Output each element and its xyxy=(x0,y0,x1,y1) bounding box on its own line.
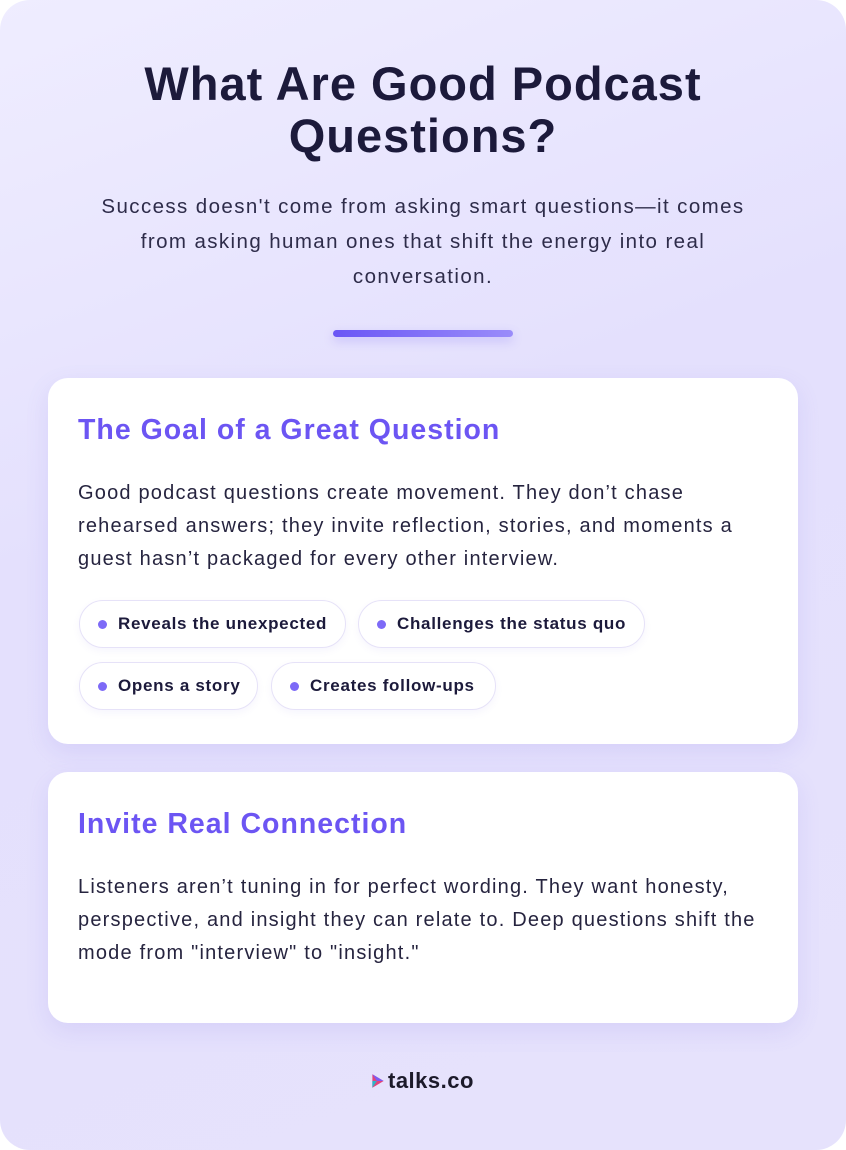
text: connection body xyxy=(78,876,756,964)
pill: follow-ups: Creates follow-ups xyxy=(310,676,475,695)
title: What Are Good Podcast xyxy=(144,57,702,110)
logo: talks.co: talks.co xyxy=(388,1068,474,1093)
subtitle xyxy=(101,195,745,288)
pill: challenges xyxy=(358,600,645,648)
pill: opens a story: Opens a story xyxy=(118,676,240,695)
pill: reveals: Reveals the unexpected xyxy=(118,614,327,633)
text: goal body: Good podcast questions create movement. They don’t chase xyxy=(78,482,684,504)
heading: goal: The Goal of a Great Question xyxy=(78,414,500,446)
pill: follow-ups xyxy=(271,662,496,710)
text: connection body: Listeners aren’t tuning in for perfect wording. They want honesty, xyxy=(78,876,729,898)
text: goal body xyxy=(78,482,733,570)
text: connection body: mode from "interview" to "insight." xyxy=(78,942,420,964)
pill: reveals xyxy=(79,600,346,648)
text: connection body: perspective, and insight they can relate to. Deep questions shift the xyxy=(78,909,756,931)
subtitle: Success doesn't come from asking smart questions—it comes xyxy=(101,195,745,218)
text: goal body: guest hasn’t packaged for every other interview. xyxy=(78,548,559,570)
heading: connection: Invite Real Connection xyxy=(78,808,407,840)
panel: invite real connection xyxy=(48,772,798,1023)
accent bar xyxy=(333,330,513,337)
text: goal body: rehearsed answers; they invite reflection, stories, and moments a xyxy=(78,515,733,537)
panel: goal of a great question xyxy=(48,378,798,744)
title xyxy=(144,57,702,162)
pill: opens a story xyxy=(79,662,258,710)
subtitle: conversation. xyxy=(353,265,493,288)
title: Questions? xyxy=(289,109,557,162)
pill: challenges: Challenges the status quo xyxy=(397,614,626,633)
subtitle: from asking human ones that shift the energy into real xyxy=(141,230,705,253)
